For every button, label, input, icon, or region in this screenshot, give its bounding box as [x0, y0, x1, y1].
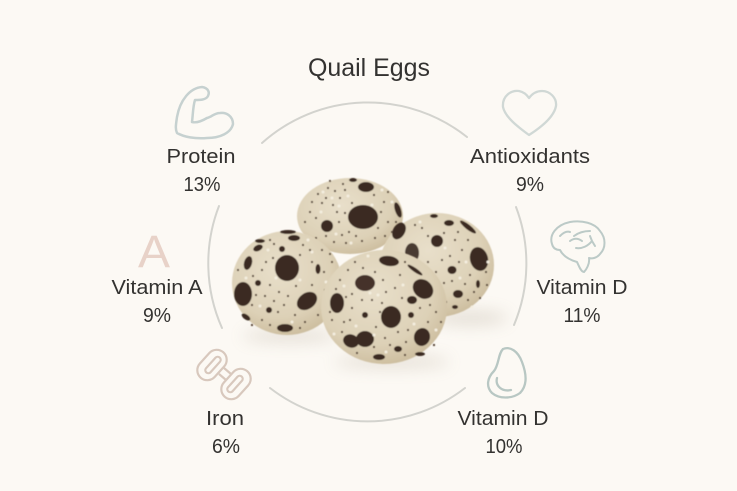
icon: brain	[551, 221, 604, 272]
label: protein: 13%	[184, 174, 221, 196]
eggs photo illustration	[232, 178, 508, 368]
label: vitamin d right: 11%	[564, 305, 601, 327]
label: iron: Iron	[206, 408, 244, 430]
egg: right	[380, 213, 494, 317]
label: iron	[206, 408, 244, 458]
label: antioxidants: 9%	[516, 174, 544, 196]
label: vitamin d bottom: 10%	[486, 436, 523, 458]
icon: dumbbell	[193, 346, 255, 403]
label: antioxidants: Antioxidants	[470, 146, 590, 168]
label: vitamin d right: Vitamin D	[536, 277, 628, 299]
ring arcs	[208, 102, 526, 421]
icon: flexed arm	[176, 87, 233, 138]
label: vitamin d right	[536, 277, 628, 327]
label: antioxidants	[470, 146, 590, 196]
egg: left	[232, 230, 342, 335]
label: vitamin a: Vitamin A	[112, 277, 203, 299]
label: vitamin a	[112, 277, 203, 327]
label: protein	[166, 146, 236, 196]
label: iron: 6%	[212, 436, 240, 458]
egg: front	[321, 250, 447, 364]
label: vitamin a: 9%	[143, 305, 171, 327]
label: vitamin d bottom: Vitamin D	[458, 408, 548, 430]
label: protein: Protein	[166, 146, 236, 168]
egg: back	[297, 178, 403, 254]
icon: letter A: A	[138, 226, 170, 277]
label: vitamin d bottom	[458, 408, 548, 458]
title: Quail Eggs	[308, 54, 430, 82]
icon: avocado	[488, 348, 526, 398]
icon: heart	[503, 91, 556, 135]
egg shadows	[242, 311, 508, 368]
